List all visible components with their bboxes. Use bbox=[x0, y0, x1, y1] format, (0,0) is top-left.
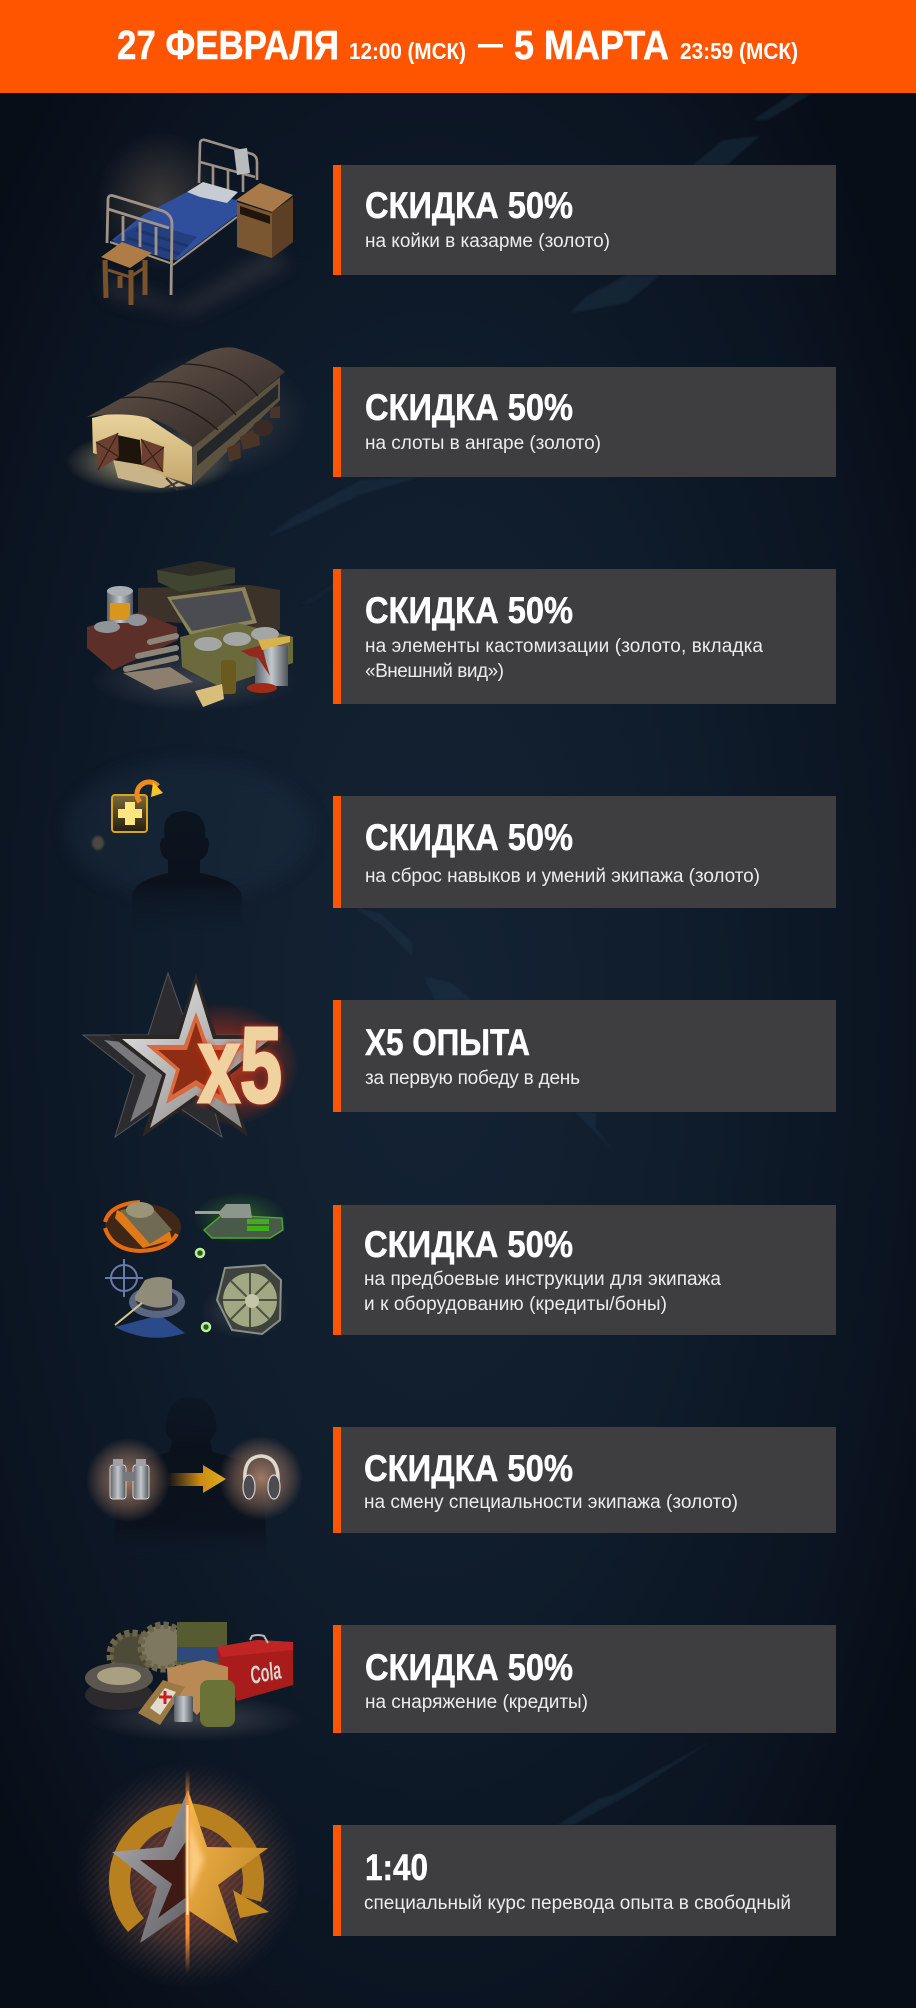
accent bar bbox=[333, 1625, 341, 1733]
description: за первую победу в день bbox=[365, 1068, 580, 1089]
description: на элементы кастомизации (золото, вкладка bbox=[365, 636, 763, 657]
panel: battle instructions discount: и к оборудованию (кредиты/боны) bbox=[364, 1294, 667, 1315]
panel: x5 experience bbox=[333, 1000, 836, 1112]
heading: 1:40 bbox=[365, 1847, 428, 1888]
panel: battle instructions discount bbox=[333, 1205, 836, 1335]
description: на сброс навыков и умений экипажа (золото) bbox=[365, 866, 760, 887]
fan bbox=[200, 1265, 290, 1340]
date end: 5 МАРТА bbox=[514, 22, 669, 68]
accent bar bbox=[333, 1000, 341, 1112]
heading: Х5 ОПЫТА bbox=[365, 1022, 530, 1063]
x5 label: x5 bbox=[198, 1004, 282, 1125]
icon: hangar bbox=[65, 347, 310, 494]
heading: СКИДКА 50% bbox=[364, 1448, 573, 1489]
heading: СКИДКА 50% bbox=[365, 1647, 573, 1688]
description: на снаряжение (кредиты) bbox=[365, 1692, 588, 1713]
panel: consumables discount bbox=[333, 1625, 836, 1733]
icon: consumables bbox=[85, 1622, 305, 1742]
description: на предбоевые инструкции для экипажа bbox=[364, 1269, 721, 1290]
heading: СКИДКА 50% bbox=[365, 590, 573, 631]
icon: instructions and equipment bbox=[105, 1192, 290, 1340]
accent bar bbox=[333, 1427, 341, 1533]
green tank bbox=[192, 1192, 288, 1244]
panel: specialty change discount bbox=[333, 1427, 836, 1533]
icon: crew specialty change bbox=[86, 1397, 303, 1560]
header banner bbox=[0, 0, 916, 93]
aiming turret bbox=[105, 1259, 185, 1338]
dash bbox=[478, 44, 503, 48]
cola label: Cola bbox=[248, 1656, 284, 1690]
time end: 23:59 (МСК) bbox=[680, 38, 798, 64]
heading: СКИДКА 50% bbox=[365, 387, 573, 428]
panel: customization discount: «Внешний вид») bbox=[365, 661, 504, 682]
accent bar bbox=[333, 796, 341, 908]
heading: СКИДКА 50% bbox=[365, 185, 573, 226]
headphones bbox=[219, 1436, 303, 1520]
panel: hangar slots discount bbox=[333, 367, 836, 477]
icon: x5 star bbox=[83, 973, 300, 1137]
accent bar bbox=[333, 1825, 341, 1936]
heading: СКИДКА 50% bbox=[365, 817, 573, 858]
icon: crew skill reset bbox=[65, 760, 315, 930]
accent bar bbox=[333, 165, 341, 275]
refresh badge bbox=[202, 1323, 210, 1331]
orange tank bbox=[105, 1202, 181, 1251]
accent bar bbox=[333, 1205, 341, 1335]
heading: СКИДКА 50% bbox=[364, 1224, 573, 1265]
panel: customization discount bbox=[333, 569, 836, 704]
arrow bbox=[167, 1465, 226, 1493]
panel: barracks discount bbox=[333, 165, 836, 275]
description: на слоты в ангаре (золото) bbox=[365, 433, 601, 454]
accent bar bbox=[333, 569, 341, 704]
time start: 12:00 (МСК) bbox=[349, 38, 466, 64]
description: на койки в казарме (золото) bbox=[365, 231, 610, 252]
panel: experience conversion rate bbox=[333, 1825, 836, 1936]
icon: customization crates bbox=[87, 561, 300, 712]
binoculars bbox=[86, 1438, 170, 1522]
icon: experience conversion star bbox=[70, 1758, 306, 1992]
panel: crew reset discount bbox=[333, 796, 836, 908]
accent bar bbox=[333, 367, 341, 477]
description: на смену специальности экипажа (золото) bbox=[364, 1492, 738, 1513]
description: специальный курс перевода опыта в свободный bbox=[364, 1893, 791, 1914]
icon: bed and nightstand bbox=[95, 130, 293, 315]
refresh badge bbox=[196, 1249, 204, 1257]
date start: 27 ФЕВРАЛЯ bbox=[117, 22, 339, 68]
